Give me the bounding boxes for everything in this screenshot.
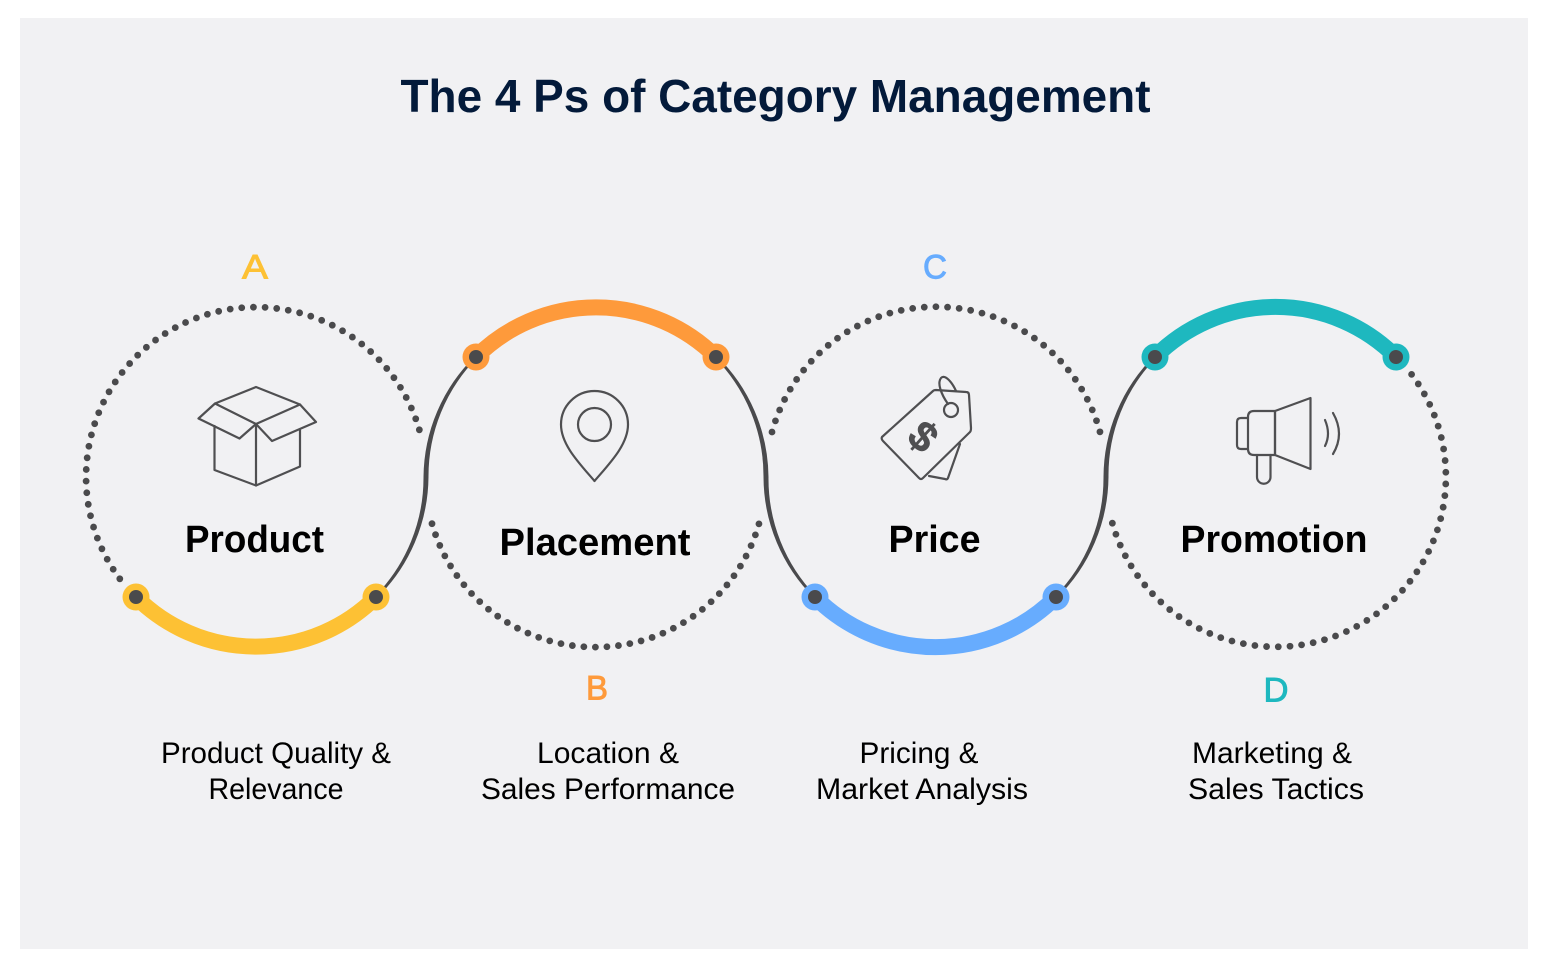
description: Promotion: Marketing & bbox=[1192, 737, 1352, 770]
description: Price: Market Analysis bbox=[816, 773, 1028, 806]
panel: Price bbox=[772, 248, 1100, 806]
dotted ring D bbox=[1112, 374, 1446, 647]
dotted ring C bbox=[772, 307, 1100, 432]
blue arc bbox=[802, 584, 1070, 647]
dotted ring B bbox=[432, 524, 759, 647]
connector line bbox=[376, 357, 1155, 597]
description: Product: Product Quality & bbox=[161, 737, 391, 770]
icon: box bbox=[198, 387, 316, 486]
heading: Promotion: Promotion bbox=[1180, 519, 1368, 561]
teal arc bbox=[1142, 307, 1410, 370]
title: The 4 Ps of Category Management bbox=[400, 70, 1150, 122]
letter B: B bbox=[586, 670, 608, 708]
letter D: D bbox=[1264, 672, 1288, 710]
description: Product bbox=[161, 737, 391, 806]
description: Placement: Location & bbox=[537, 737, 679, 770]
description: Price bbox=[816, 737, 1028, 806]
yellow arc bbox=[122, 584, 390, 647]
icon: map pin bbox=[561, 391, 628, 481]
dotted ring A bbox=[86, 307, 419, 579]
panel: Placement bbox=[432, 307, 759, 806]
icon: price tag bbox=[882, 377, 971, 479]
description: Placement: Sales Performance bbox=[481, 773, 735, 806]
description: Product: Relevance bbox=[208, 773, 344, 806]
heading: Price: Price bbox=[888, 519, 980, 561]
letter C: C bbox=[923, 248, 947, 286]
icon: megaphone bbox=[1237, 398, 1339, 484]
description: Price: Pricing & bbox=[860, 737, 979, 770]
dollar sign: $ bbox=[899, 411, 948, 462]
description: Promotion: Sales Tactics bbox=[1188, 773, 1364, 806]
heading: Placement: Placement bbox=[500, 522, 691, 564]
orange arc bbox=[462, 307, 730, 370]
description: Placement bbox=[481, 737, 735, 806]
panel: Promotion bbox=[1112, 307, 1446, 806]
letter A: A bbox=[242, 248, 268, 286]
heading: Product: Product bbox=[185, 519, 324, 561]
description: Promotion bbox=[1188, 737, 1364, 806]
panel: Product bbox=[86, 248, 419, 806]
